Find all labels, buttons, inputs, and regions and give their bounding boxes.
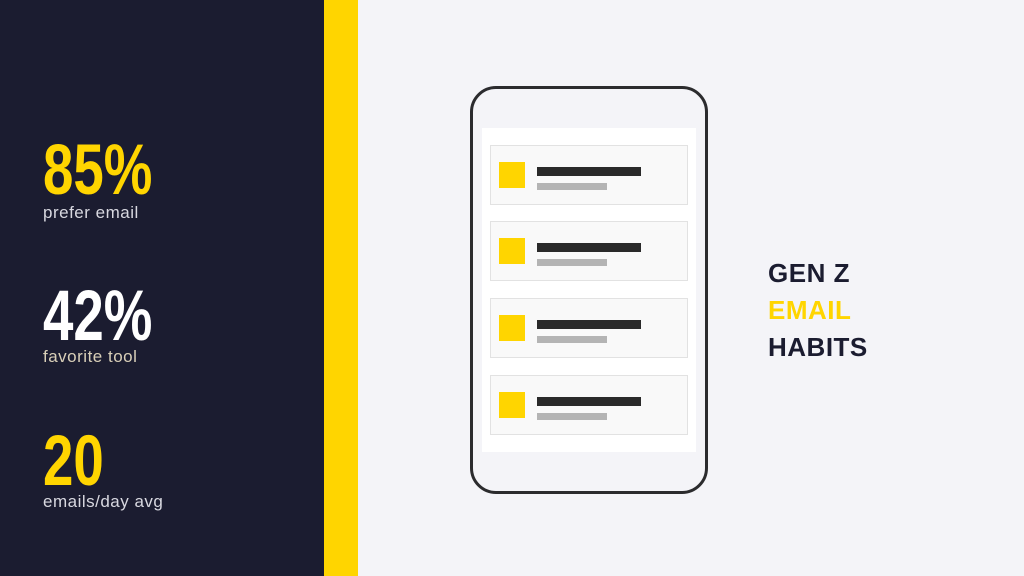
email card 2 xyxy=(490,221,688,281)
title: EMAIL xyxy=(768,295,851,325)
title: HABITS xyxy=(768,332,868,362)
title: GEN Z xyxy=(768,258,850,288)
email card 4 xyxy=(490,375,688,435)
email card 3 xyxy=(490,298,688,358)
panel: stats sidebar xyxy=(0,0,324,576)
email card 1 xyxy=(490,145,688,205)
label: prefer email: prefer email xyxy=(43,203,139,222)
stat: 85%: 85% xyxy=(43,131,152,210)
label: emails/day avg: emails/day avg xyxy=(43,492,163,511)
title xyxy=(768,258,868,362)
stat: 42%: 42% xyxy=(43,277,152,356)
icon: phone xyxy=(470,86,708,494)
label: favorite tool: favorite tool xyxy=(43,347,137,366)
phone screen xyxy=(482,128,696,452)
yellow accent strip xyxy=(324,0,358,576)
stat: 20: 20 xyxy=(43,422,104,501)
